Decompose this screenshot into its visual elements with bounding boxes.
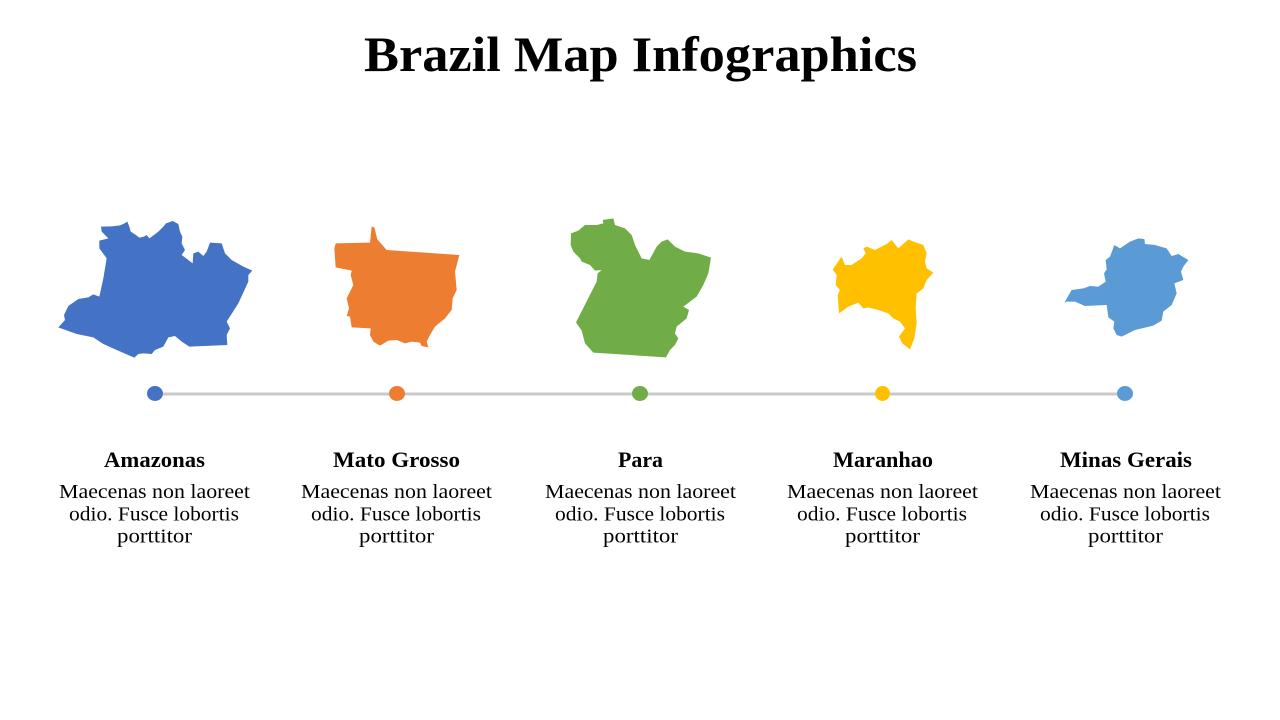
- text block: Maranhao: [787, 447, 978, 548]
- marker: Mato Grosso: [389, 386, 405, 401]
- heading: Amazonas: Amazonas: [104, 447, 205, 472]
- description: Amazonas: Maecenas non laoreet: [59, 481, 250, 503]
- description: Minas Gerais: odio. Fusce lobortis: [1040, 504, 1210, 526]
- marker: Para: [632, 386, 648, 401]
- description: Mato Grosso: odio. Fusce lobortis: [311, 504, 481, 526]
- text block: Amazonas: [59, 447, 250, 548]
- description: Maranhao: Maecenas non laoreet: [787, 481, 978, 503]
- description: Mato Grosso: Maecenas non laoreet: [301, 481, 492, 503]
- marker: Maranhao: [875, 386, 890, 401]
- heading: Para: Para: [618, 447, 663, 472]
- text block: Minas Gerais: [1030, 447, 1221, 548]
- description: Mato Grosso: [301, 481, 492, 548]
- description: Para: porttitor: [603, 526, 678, 548]
- description: Mato Grosso: porttitor: [359, 526, 434, 548]
- map: Amazonas: [58, 221, 252, 358]
- heading: Minas Gerais: Minas Gerais: [1060, 447, 1192, 472]
- map: Mato Grosso: [334, 227, 459, 347]
- description: Amazonas: odio. Fusce lobortis: [69, 504, 239, 526]
- timeline: [147, 386, 1133, 401]
- description: Para: Maecenas non laoreet: [545, 481, 736, 503]
- description: Amazonas: [59, 481, 250, 548]
- map: Para: [571, 218, 711, 357]
- title: Brazil Map Infographics: [364, 26, 917, 82]
- description: Amazonas: porttitor: [117, 526, 192, 548]
- text block: Para: [545, 447, 736, 548]
- map: Minas Gerais: [1064, 238, 1188, 337]
- description: Minas Gerais: porttitor: [1088, 526, 1163, 548]
- map: Maranhao: [833, 239, 933, 349]
- description: Minas Gerais: Maecenas non laoreet: [1030, 481, 1221, 503]
- description: Para: odio. Fusce lobortis: [555, 504, 725, 526]
- text block: Mato Grosso: [301, 447, 492, 548]
- description: Maranhao: odio. Fusce lobortis: [797, 504, 967, 526]
- description: Maranhao: [787, 481, 978, 548]
- heading: Maranhao: Maranhao: [833, 447, 933, 472]
- description: Minas Gerais: [1030, 481, 1221, 548]
- description: Maranhao: porttitor: [845, 526, 920, 548]
- heading: Mato Grosso: Mato Grosso: [333, 447, 460, 472]
- marker: Amazonas: [147, 386, 163, 401]
- marker: Minas Gerais: [1117, 386, 1133, 401]
- description: Para: [545, 481, 736, 548]
